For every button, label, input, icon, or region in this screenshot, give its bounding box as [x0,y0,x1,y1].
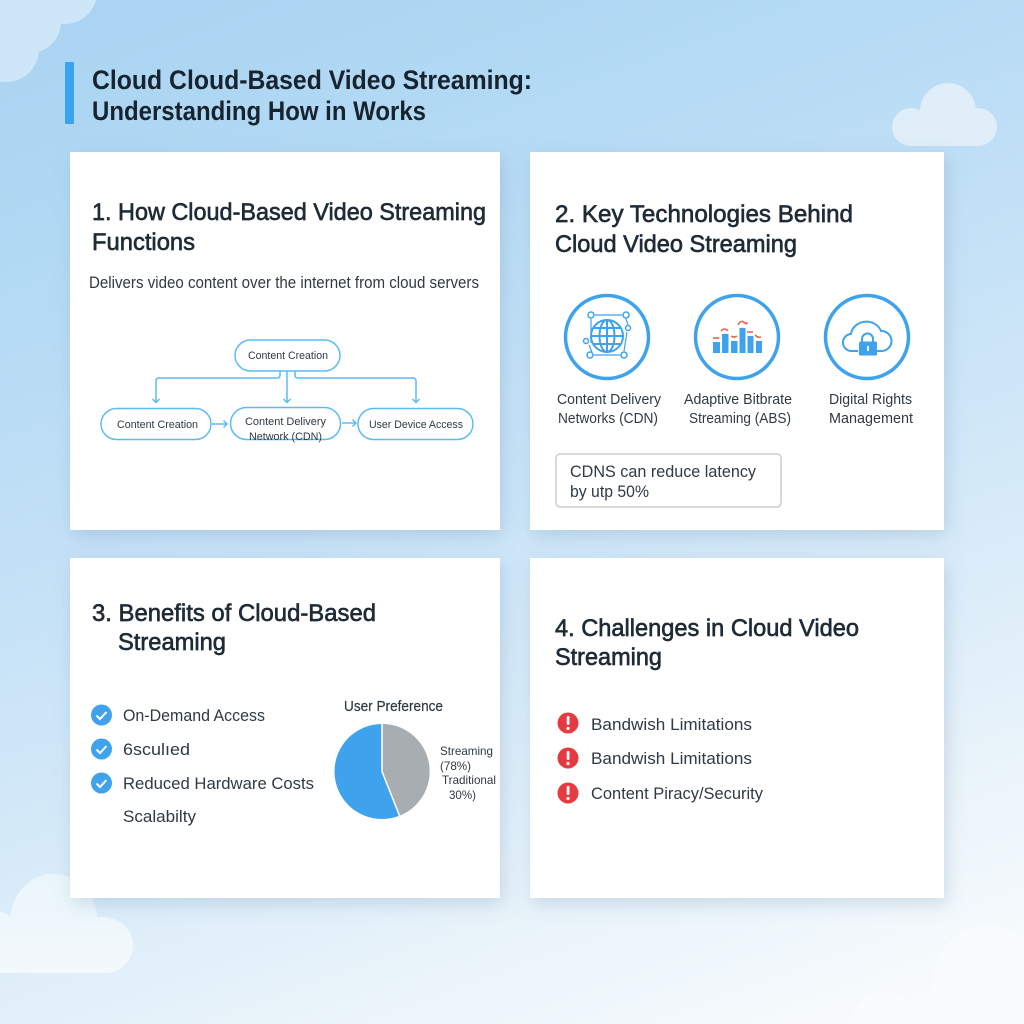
label: abs [684,391,792,427]
challenge: bandwidth 2: Bandwish Limitations [591,749,752,768]
pie legend [440,744,496,802]
benefit: escuted: 6sculıed [123,740,190,759]
heading: section 4 [555,615,859,671]
node: content creation top: Content Creation [248,350,328,362]
callout [556,454,781,507]
cloud: bottom right [849,925,1024,1024]
label: drm: Digital Rights [829,391,912,408]
heading: section 2 [555,201,853,258]
label: drm [829,391,914,427]
icon: cloud lock [826,296,908,378]
chart title: User Preference [344,699,443,715]
node: content delivery network: Content Delivery [245,416,326,428]
benefit: reduced hardware costs: Reduced Hardware Costs [123,774,314,793]
connector arrows [152,371,420,428]
node: content delivery network [230,408,340,443]
node: user device access: User Device Access [369,419,463,431]
heading: section 3 [92,600,376,656]
benefit: escuted [91,738,190,760]
challenge: content piracy: Content Piracy/Security [591,784,763,803]
pie chart [334,724,430,819]
heading: section 2: Cloud Video Streaming [555,231,797,258]
label: abs: Adaptive Bitbrate [684,391,792,408]
cloud: bottom left [0,874,133,973]
label: drm: Management [829,410,914,427]
flow diagram [101,340,473,443]
heading: section 2: 2. Key Technologies Behind [555,201,853,228]
pie legend: (78%) [440,759,471,773]
heading: section 4: 4. Challenges in Cloud Video [555,615,859,642]
callout: CDNS can reduce latency [570,463,757,481]
node: content creation [101,408,211,440]
node: content delivery network: Network (CDN) [249,431,322,443]
heading: section 4: Streaming [555,644,662,671]
title [92,65,532,126]
label: cdn [557,391,661,427]
panel: key technologies [530,152,944,530]
node: user device access [358,408,473,440]
icon: cdn globe [566,296,648,378]
pie legend: Traditional [442,773,496,787]
cloud: top right [892,83,997,146]
label: cdn: Content Delivery [557,391,661,408]
node: content creation: Content Creation [117,419,198,431]
panel: benefits [70,558,500,898]
heading: section 1 [92,199,486,256]
benefit: on-demand access: On-Demand Access [123,706,265,725]
description text: Delivers video content over the internet from cloud servers [89,274,479,292]
label: abs: Streaming (ABS) [689,410,791,427]
pie legend: 30%) [449,788,476,802]
icon: adaptive bitrate bars [696,296,778,378]
label: cdn: Networks (CDN) [558,410,658,427]
callout: by utp 50% [570,483,649,501]
pie legend: Streaming [440,744,493,758]
title accent bar [65,62,74,124]
challenge: bandwidth 1: Bandwish Limitations [591,715,752,734]
panel: how it functions [70,152,500,530]
heading: section 3: Streaming [118,629,226,656]
heading: section 1: 1. How Cloud-Based Video Streaming [92,199,486,226]
title: Understanding How in Works [92,96,426,126]
benefit: scalability: Scalabilty [123,807,196,826]
cloud: top left [0,0,97,82]
heading: section 3: 3. Benefits of Cloud-Based [92,600,376,627]
panel: challenges [530,558,944,898]
title: Cloud Cloud-Based Video Streaming: [92,65,532,95]
heading: section 1: Functions [92,229,195,256]
node: content creation top [235,340,340,371]
